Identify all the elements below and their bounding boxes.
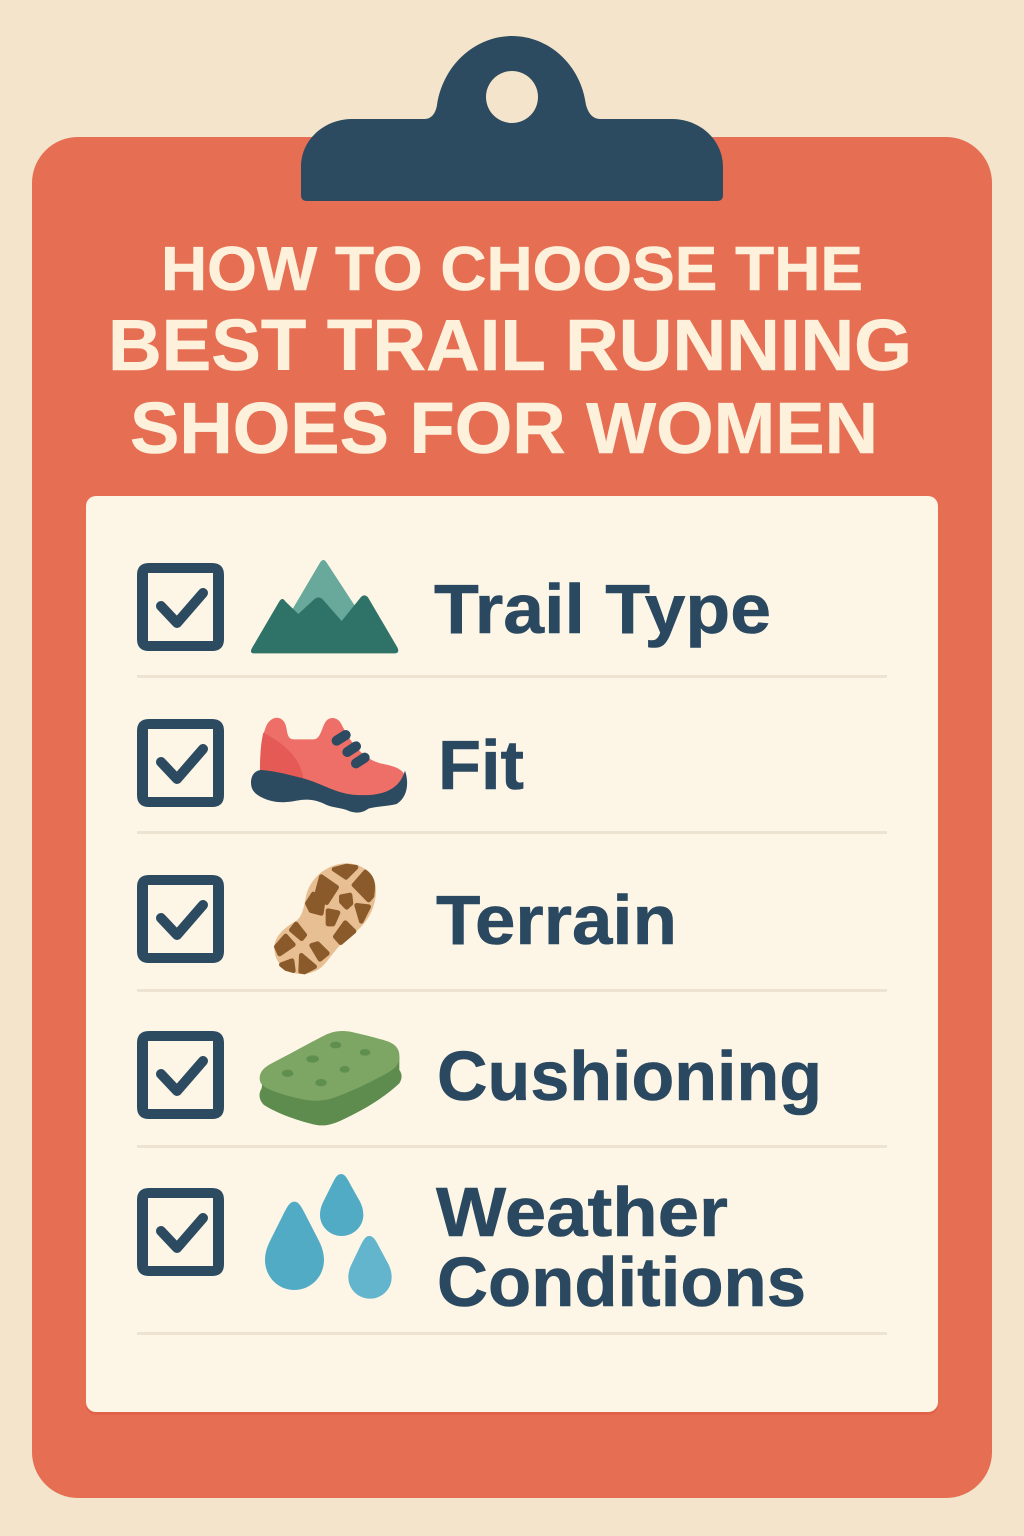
label: cushioning: Cushioning: [437, 1037, 822, 1115]
checkbox: terrain: [137, 875, 224, 963]
row: trail type: [137, 560, 771, 653]
icon: running shoe: [251, 718, 407, 813]
checkbox: fit: [137, 719, 224, 807]
icon: cushion foam: [260, 1031, 402, 1125]
icon: mountains: [251, 560, 398, 653]
label: fit: Fit: [438, 726, 524, 804]
label: terrain: Terrain: [436, 881, 677, 959]
label: trail type: Trail Type: [434, 570, 771, 648]
checklist panel: [86, 496, 938, 1415]
row: weather conditions: [137, 1173, 806, 1321]
row: terrain: [137, 863, 677, 974]
checkbox: cushioning: [137, 1031, 224, 1119]
title: SHOES FOR WOMEN: [130, 389, 878, 469]
label: weather conditions: Weather: [436, 1173, 728, 1251]
title: [108, 235, 912, 469]
title: BEST TRAIL RUNNING: [108, 306, 912, 386]
label: weather conditions: Conditions: [437, 1243, 806, 1321]
clipboard clip: [301, 36, 723, 201]
row: fit: [137, 718, 524, 813]
label: weather conditions: [436, 1173, 806, 1321]
row: cushioning: [137, 1031, 822, 1125]
icon: shoe tread: [274, 863, 376, 974]
title: HOW TO CHOOSE THE: [161, 235, 863, 304]
checkbox: trail type: [137, 563, 224, 651]
icon: water drops: [265, 1174, 392, 1299]
checkbox: weather conditions: [137, 1188, 224, 1276]
